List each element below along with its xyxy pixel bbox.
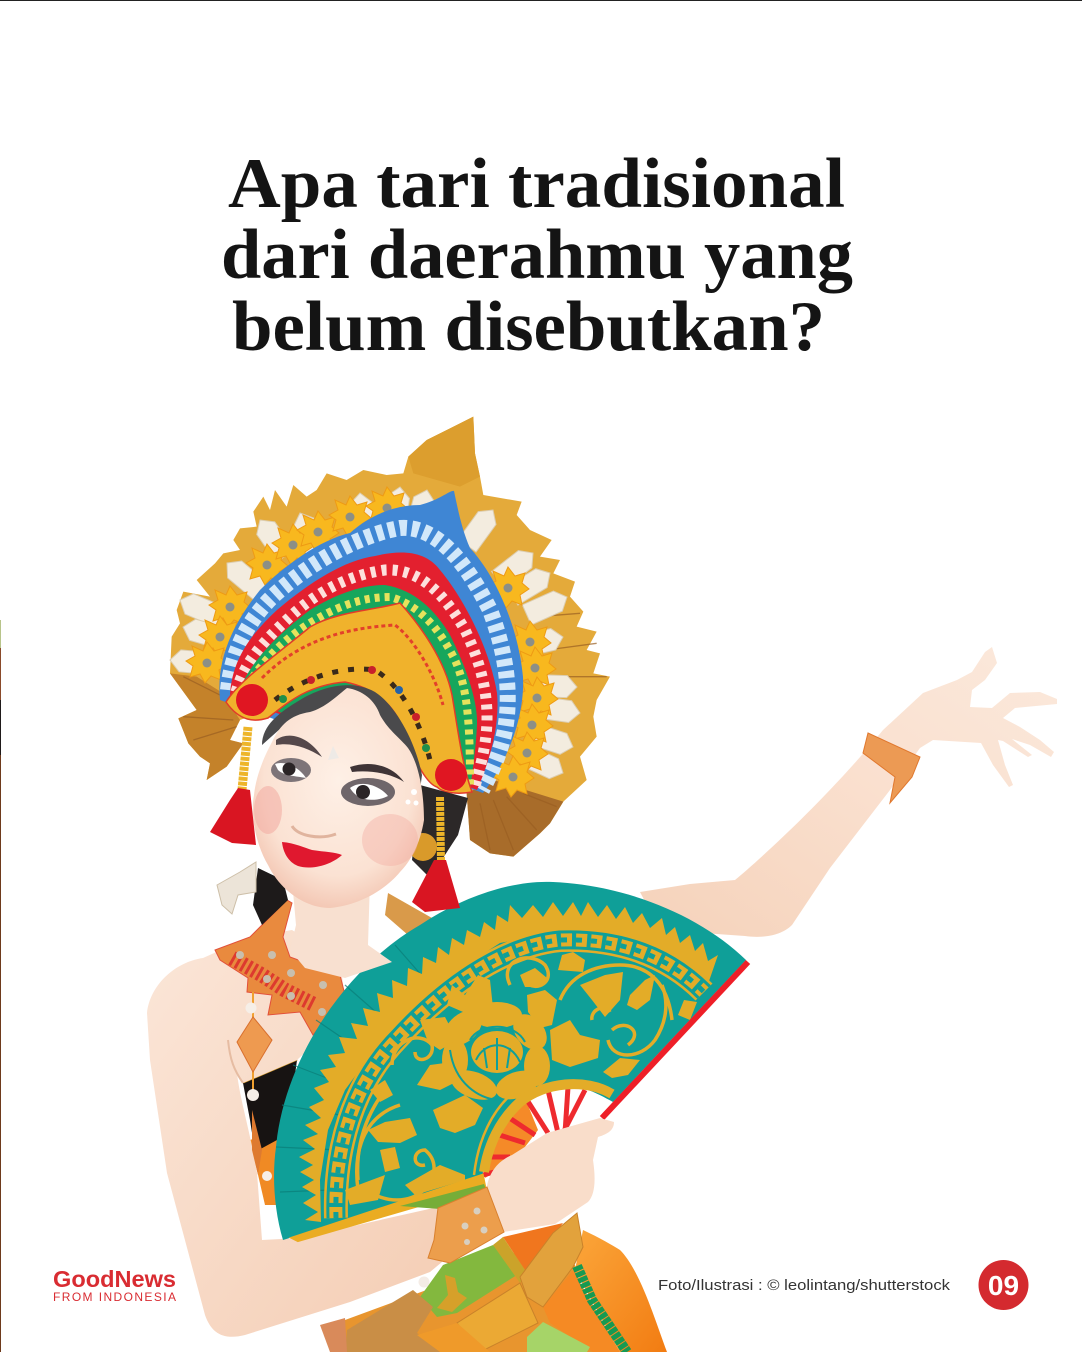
headdress green ring	[238, 585, 477, 790]
skirt gold strip	[493, 1237, 527, 1283]
collar right	[385, 893, 432, 935]
left red tassel	[210, 788, 256, 845]
face	[253, 688, 424, 908]
fan gold bottom strip	[294, 1176, 484, 1240]
right eye	[341, 778, 395, 806]
skirt orange outer drape	[575, 1230, 667, 1352]
skirt orange upper	[503, 1223, 563, 1273]
holding hand	[487, 1118, 614, 1232]
dancer raised arm and hand	[640, 647, 1057, 937]
headdress gold flowers	[186, 487, 558, 797]
earring	[409, 833, 437, 861]
headdress lower right dark feathers	[467, 780, 563, 857]
page number badge: 09	[988, 1270, 1019, 1301]
headdress red ring	[230, 553, 498, 790]
hand fan	[274, 882, 748, 1240]
skirt orange mid	[543, 1270, 620, 1352]
right ornament pom	[435, 759, 467, 791]
skirt gold belt middle	[457, 1283, 538, 1352]
left bead strand	[242, 727, 248, 790]
skirt green cloth	[420, 1245, 520, 1317]
skirt green fringe	[577, 1266, 627, 1352]
fan peony	[437, 1002, 554, 1105]
dancer upper bracelet	[863, 733, 920, 803]
left ornament pom	[236, 684, 268, 716]
title: belum disebutkan?	[232, 288, 825, 366]
nose	[292, 826, 336, 837]
fan red spokes	[483, 1087, 585, 1175]
collar necklace	[215, 900, 345, 1035]
right bead strand	[440, 797, 441, 862]
hair behind ear	[412, 785, 468, 878]
fan orange backdrop in hole	[485, 1098, 538, 1178]
black bodice	[243, 1060, 297, 1152]
fan inner ring	[474, 1092, 514, 1175]
bodice gold trim	[243, 1059, 297, 1082]
collar gems	[236, 951, 327, 1016]
title	[221, 145, 853, 366]
page number badge	[978, 1260, 1028, 1310]
hair fringe	[262, 685, 422, 790]
fan gold scrolls	[357, 958, 672, 1200]
fan peony teal details	[450, 1027, 525, 1100]
headdress blue ring	[219, 491, 523, 793]
photo credit: Foto/Ilustrasi : © leolintang/shutterstock	[658, 1277, 951, 1294]
right eyebrow	[350, 764, 404, 782]
red ring leaves	[236, 570, 487, 790]
headdress white feathers	[169, 485, 582, 783]
blue ring leaves	[228, 528, 508, 790]
headdress lower left dark feathers	[170, 673, 243, 780]
dancer torso and arm	[147, 930, 442, 1337]
headdress gold jagged backing	[170, 417, 610, 857]
white flower in hair	[217, 862, 256, 914]
top rule	[0, 0, 1082, 1]
green ring leaves	[242, 597, 470, 785]
arm pearl	[418, 1276, 430, 1288]
skirt base	[330, 1250, 600, 1352]
neck	[290, 880, 392, 978]
headdress gold band	[226, 603, 472, 793]
left eyebrow	[276, 736, 322, 757]
skirt light green	[527, 1322, 590, 1352]
skirt gold belt upper	[520, 1213, 583, 1307]
skirt gold panel left	[345, 1290, 447, 1352]
fan fold lines	[276, 945, 430, 1192]
skirt gold motif	[437, 1275, 467, 1312]
green cloth between fan and arm	[400, 1184, 490, 1209]
logo	[53, 1266, 176, 1304]
gold band jewels	[275, 669, 430, 760]
logo: GoodNews	[53, 1266, 176, 1292]
title: Apa tari tradisional	[228, 145, 845, 223]
logo: FROM INDONESIA	[53, 1290, 176, 1304]
fan teal leaf	[274, 882, 746, 1240]
fan gold leaves	[345, 952, 697, 1205]
orange under bodice	[250, 1130, 282, 1205]
skirt centre orange	[417, 1323, 490, 1352]
headdress	[169, 417, 610, 857]
hair behind neck	[253, 868, 288, 925]
lips	[282, 842, 342, 868]
fan gold hub arc	[484, 1084, 612, 1172]
dancer figure	[147, 417, 1057, 1352]
cheek blush left	[254, 786, 282, 834]
left edge sliver	[0, 620, 1, 1352]
cheek blush right	[362, 814, 418, 866]
fan dentil border	[299, 902, 718, 1222]
gold band red tracery	[262, 625, 443, 705]
right red tassel	[412, 860, 460, 912]
lower bracelet	[428, 1187, 504, 1263]
armpit crease	[228, 1040, 243, 1083]
feather streaks	[183, 613, 607, 850]
hanging ornament	[237, 992, 272, 1181]
left eye	[271, 758, 311, 782]
skirt	[320, 1213, 667, 1352]
skirt red trim left	[320, 1318, 347, 1352]
bracelet gems	[462, 1208, 488, 1245]
fan meander band	[336, 940, 704, 1218]
title: dari daerahmu yang	[221, 216, 853, 294]
gold band gems	[279, 666, 430, 752]
collar red pattern	[232, 958, 315, 1005]
bindi	[328, 746, 339, 760]
top gold leaf texture	[408, 417, 480, 487]
fan right red guard stick	[602, 962, 748, 1118]
cheek dots	[406, 789, 418, 806]
